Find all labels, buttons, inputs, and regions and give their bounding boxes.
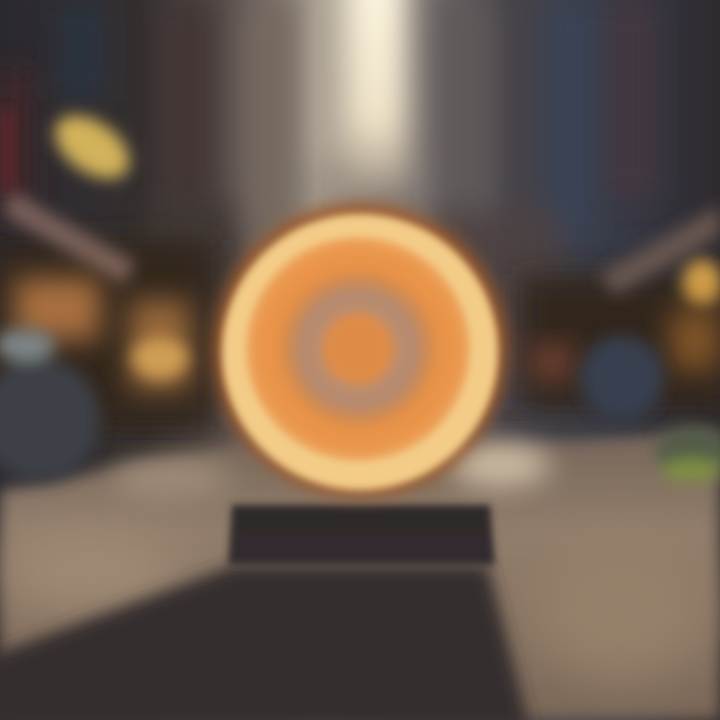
cream ring [222,214,498,490]
green plant [656,426,720,481]
light beam at top centre [315,0,407,185]
orange field with grey ring and centre [246,237,470,461]
foreground shadow [0,565,530,720]
left blue-grey sphere [0,329,100,482]
right shopfronts [520,205,720,410]
ground: pavement [0,430,720,720]
left shopfronts [0,110,215,430]
glowing disc [213,203,507,497]
pedestal base [228,505,495,565]
disc halo [213,203,507,497]
icon: yellow sign [43,102,141,192]
right blue-grey sphere [580,336,664,420]
